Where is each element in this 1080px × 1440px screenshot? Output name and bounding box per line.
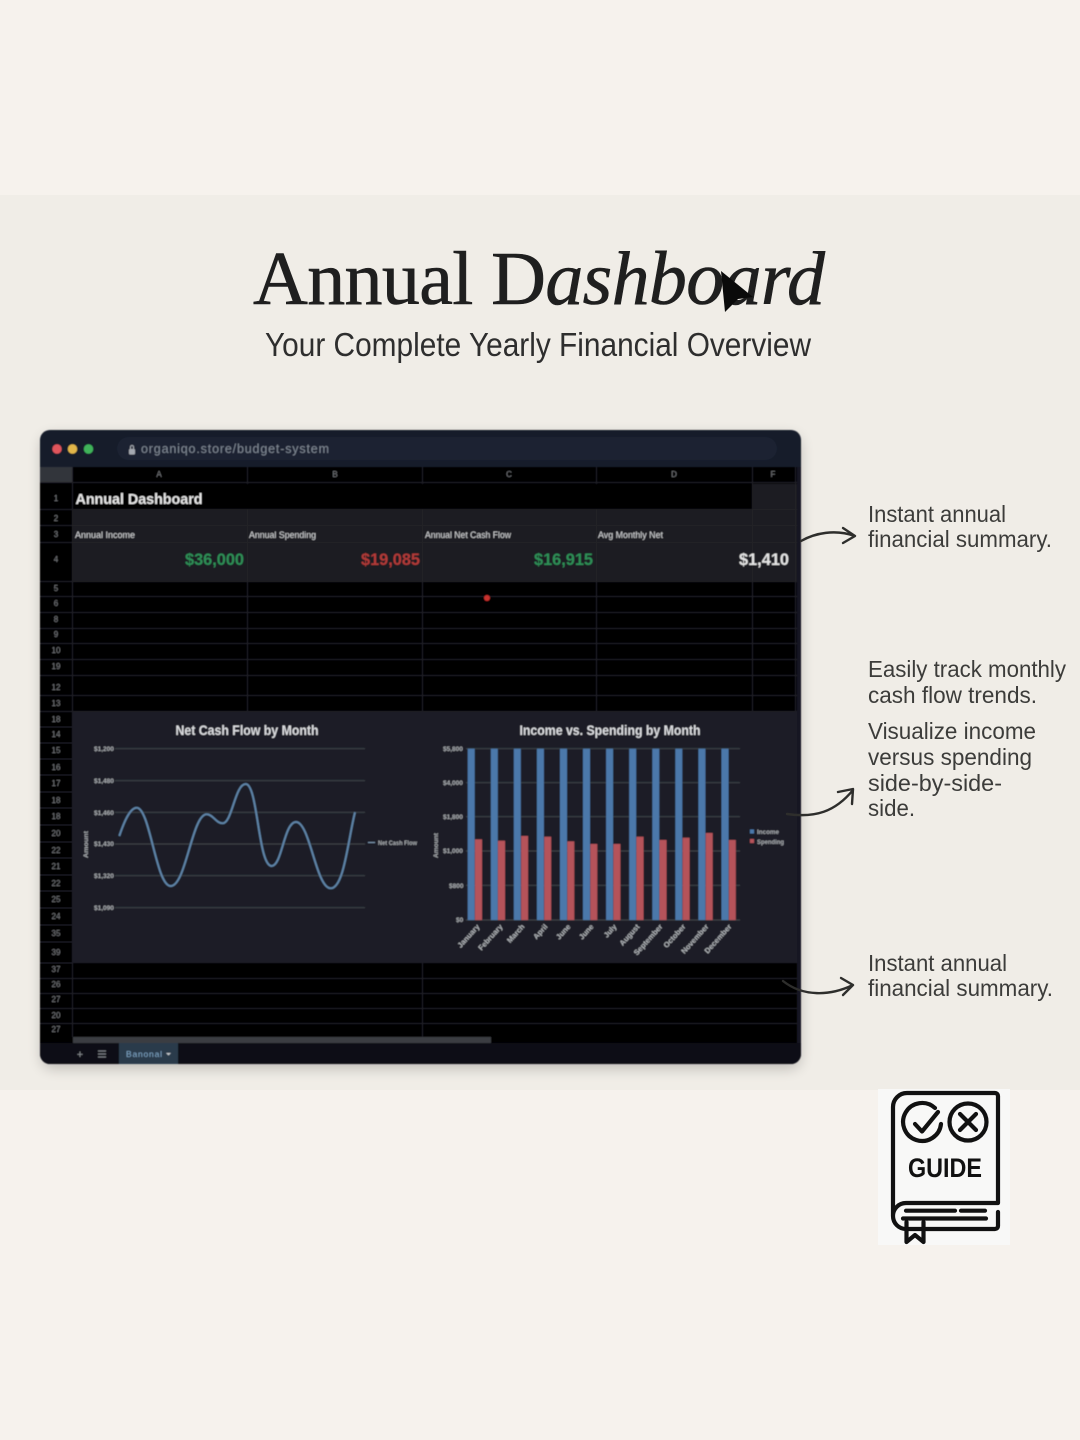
row numbers: 10	[52, 646, 61, 655]
stat: average monthly net: Avg Monthly Net	[598, 530, 663, 541]
bar chart: income vs spending by month: $1,000	[443, 848, 463, 855]
bar chart: income vs spending by month: Amount	[433, 832, 440, 858]
bar chart: income vs spending by month: Spending	[757, 839, 784, 846]
panel: spreadsheet window	[40, 430, 801, 1064]
bar chart: income vs spending by month: April	[531, 922, 549, 941]
callout: annual summary bottom	[868, 950, 1053, 1001]
icon: guide book	[878, 1089, 1010, 1245]
row numbers: 16	[52, 763, 61, 772]
bar chart: income vs spending by month	[433, 722, 784, 957]
arrow: to lower sheet	[783, 978, 853, 995]
bar chart: income vs spending by month: $4,000	[443, 780, 463, 787]
row numbers: 20	[52, 1011, 61, 1020]
sheet tabs bar: Banonal	[126, 1049, 162, 1059]
row numbers: 37	[52, 965, 61, 974]
line chart: net cash flow by month: $1,480	[94, 778, 114, 785]
row numbers: 3	[54, 530, 59, 539]
line chart: net cash flow by month: $1,430	[94, 841, 114, 848]
line chart: net cash flow by month: $1,090	[94, 905, 114, 912]
row numbers: 22	[52, 846, 61, 855]
row numbers: 39	[52, 948, 61, 957]
stat: annual spending: Annual Spending	[249, 530, 316, 541]
row numbers: 25	[52, 895, 61, 904]
bar chart: income vs spending by month: $1,800	[443, 814, 463, 821]
stat: annual net cash flow: Annual Net Cash Flow	[425, 530, 511, 541]
stat: annual spending	[249, 530, 420, 569]
icon: cursor arrow	[721, 271, 753, 312]
red dot	[484, 595, 490, 601]
scrollbar	[73, 1037, 491, 1043]
row numbers: 27	[52, 1025, 61, 1034]
row numbers: 27	[52, 995, 61, 1004]
window shadow	[42, 436, 800, 1068]
row numbers: 18	[52, 812, 61, 821]
row numbers: 5	[54, 584, 59, 593]
column headers: B	[332, 470, 338, 479]
row numbers: 2	[54, 514, 59, 523]
column headers: D	[671, 470, 677, 479]
bar chart: income vs spending by month: November	[679, 922, 711, 956]
row numbers: 15	[52, 746, 61, 755]
column headers: C	[506, 470, 512, 479]
stat: annual income: $36,000	[185, 550, 244, 569]
row numbers: 35	[52, 929, 61, 938]
bar chart: income vs spending by month: $5,800	[443, 746, 463, 753]
stat: average monthly net	[598, 530, 789, 569]
bar chart: income vs spending by month: August	[618, 922, 642, 948]
line chart: net cash flow by month: Net Cash Flow by Month	[176, 722, 318, 738]
stat: annual spending: $19,085	[361, 550, 420, 569]
row numbers: 18	[52, 715, 61, 724]
arrow: to income chart	[787, 789, 853, 815]
callout: annual summary bottom: Instant annual	[868, 950, 1007, 976]
row numbers: 24	[52, 912, 61, 921]
callout: annual summary bottom: financial summary.	[868, 975, 1053, 1001]
stat: annual income: Annual Income	[75, 530, 135, 541]
bar chart: income vs spending by month: January	[456, 922, 482, 950]
sheet tabs bar: +	[77, 1049, 83, 1061]
stat: annual income	[75, 530, 244, 569]
callout: income versus spending: Visualize income	[868, 718, 1036, 744]
callout: income versus spending	[868, 718, 1036, 821]
bar chart: income vs spending by month: October	[662, 922, 688, 950]
row numbers: 9	[54, 630, 59, 639]
bar chart: income vs spending by month: March	[505, 922, 527, 945]
stat: annual net cash flow	[425, 530, 593, 569]
stat: annual net cash flow: $16,915	[534, 550, 593, 569]
line chart: net cash flow by month: Amount	[83, 830, 90, 858]
callout: monthly cash flow: Easily track monthly	[868, 656, 1066, 682]
address bar: organiqo.store/budget-system	[141, 442, 329, 456]
row numbers: 1	[54, 494, 59, 503]
row numbers: 19	[52, 662, 61, 671]
icon: guide book: GUIDE	[908, 1153, 982, 1183]
row numbers: 13	[52, 699, 61, 708]
bar chart: income vs spending by month: December	[703, 922, 734, 955]
line chart: net cash flow by month: Net Cash Flow	[378, 840, 418, 847]
chart panel background	[72, 712, 797, 963]
address bar	[117, 437, 777, 460]
bar chart: income vs spending by month: July	[602, 922, 619, 939]
subtitle: Your Complete Yearly Financial Overview	[265, 326, 811, 363]
row numbers: 12	[52, 683, 61, 692]
browser traffic lights	[52, 444, 93, 454]
callout: annual summary top: Instant annual	[868, 501, 1006, 527]
line chart: net cash flow by month	[83, 722, 418, 912]
grid lines	[40, 467, 797, 1037]
row numbers: 22	[52, 879, 61, 888]
row numbers: 20	[52, 829, 61, 838]
sheet tabs bar	[40, 1043, 801, 1064]
bar chart: income vs spending by month: $0	[456, 917, 464, 924]
row numbers: 6	[54, 599, 59, 608]
callout: income versus spending: versus spending	[868, 744, 1032, 770]
stat: average monthly net: $1,410	[739, 550, 789, 569]
line chart: net cash flow by month: $1,320	[94, 873, 114, 880]
column headers: A	[156, 470, 162, 479]
callout: annual summary top	[868, 501, 1052, 552]
callout: monthly cash flow: cash flow trends.	[868, 682, 1037, 708]
title: Annual Dashboard	[253, 237, 826, 321]
arrow: to annual summary	[801, 528, 855, 543]
callout: income versus spending: side.	[868, 795, 915, 821]
bar chart: income vs spending by month: $800	[449, 883, 464, 890]
row numbers: 21	[52, 862, 61, 871]
row numbers	[52, 494, 61, 1034]
callout: income versus spending: side-by-side-	[868, 770, 1002, 796]
row numbers: 26	[52, 980, 61, 989]
row numbers: 17	[52, 779, 61, 788]
bar chart: income vs spending by month: June	[577, 922, 595, 941]
row numbers: 4	[54, 555, 59, 564]
sheet body	[40, 467, 801, 1043]
row numbers: 18	[52, 796, 61, 805]
column headers: F	[771, 470, 776, 479]
column headers	[40, 467, 776, 482]
sheet title row: Annual Dashboard	[76, 492, 202, 508]
row numbers: 8	[54, 615, 59, 624]
summary band background	[72, 484, 797, 581]
bar chart: income vs spending by month: February	[476, 922, 505, 952]
row numbers: 14	[52, 730, 61, 739]
bar chart: income vs spending by month: September	[632, 922, 665, 957]
bar chart: income vs spending by month: June	[554, 922, 572, 941]
line chart: net cash flow by month: $1,200	[94, 746, 114, 753]
callout: monthly cash flow	[868, 656, 1066, 708]
line chart: net cash flow by month: $1,460	[94, 810, 114, 817]
bar chart: income vs spending by month: Income	[757, 829, 779, 836]
bar chart: income vs spending by month: Income vs. Spending by Month	[520, 722, 700, 738]
callout: annual summary top: financial summary.	[868, 526, 1052, 552]
sheet title row	[73, 484, 752, 509]
